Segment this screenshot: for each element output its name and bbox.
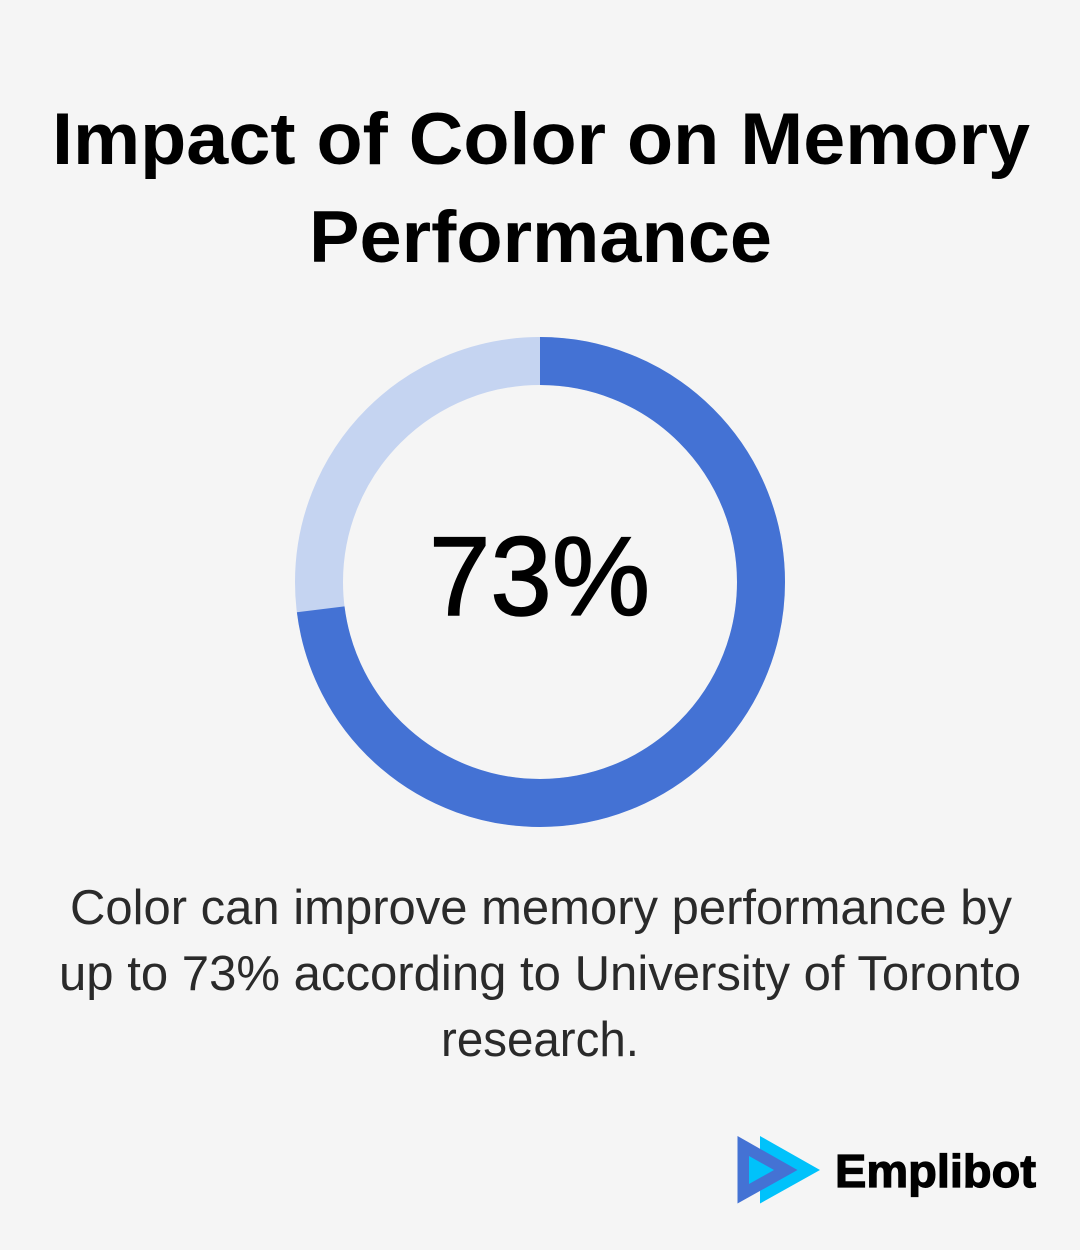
donut value: 73% <box>429 514 650 639</box>
title: Impact of Color on Memory <box>52 99 1030 180</box>
logo wordmark: Emplibot <box>835 1145 1036 1197</box>
title: Performance <box>309 197 772 278</box>
description text: Color can improve memory performance by <box>70 881 1012 935</box>
title <box>52 99 1030 278</box>
logo: Emplibot <box>738 1136 1036 1204</box>
description text: up to 73% according to University of Toronto <box>59 947 1021 1001</box>
description text: research. <box>441 1013 639 1067</box>
donut chart: 73 percent <box>319 361 761 803</box>
icon: play triangles <box>738 1136 820 1204</box>
description text <box>59 881 1021 1067</box>
